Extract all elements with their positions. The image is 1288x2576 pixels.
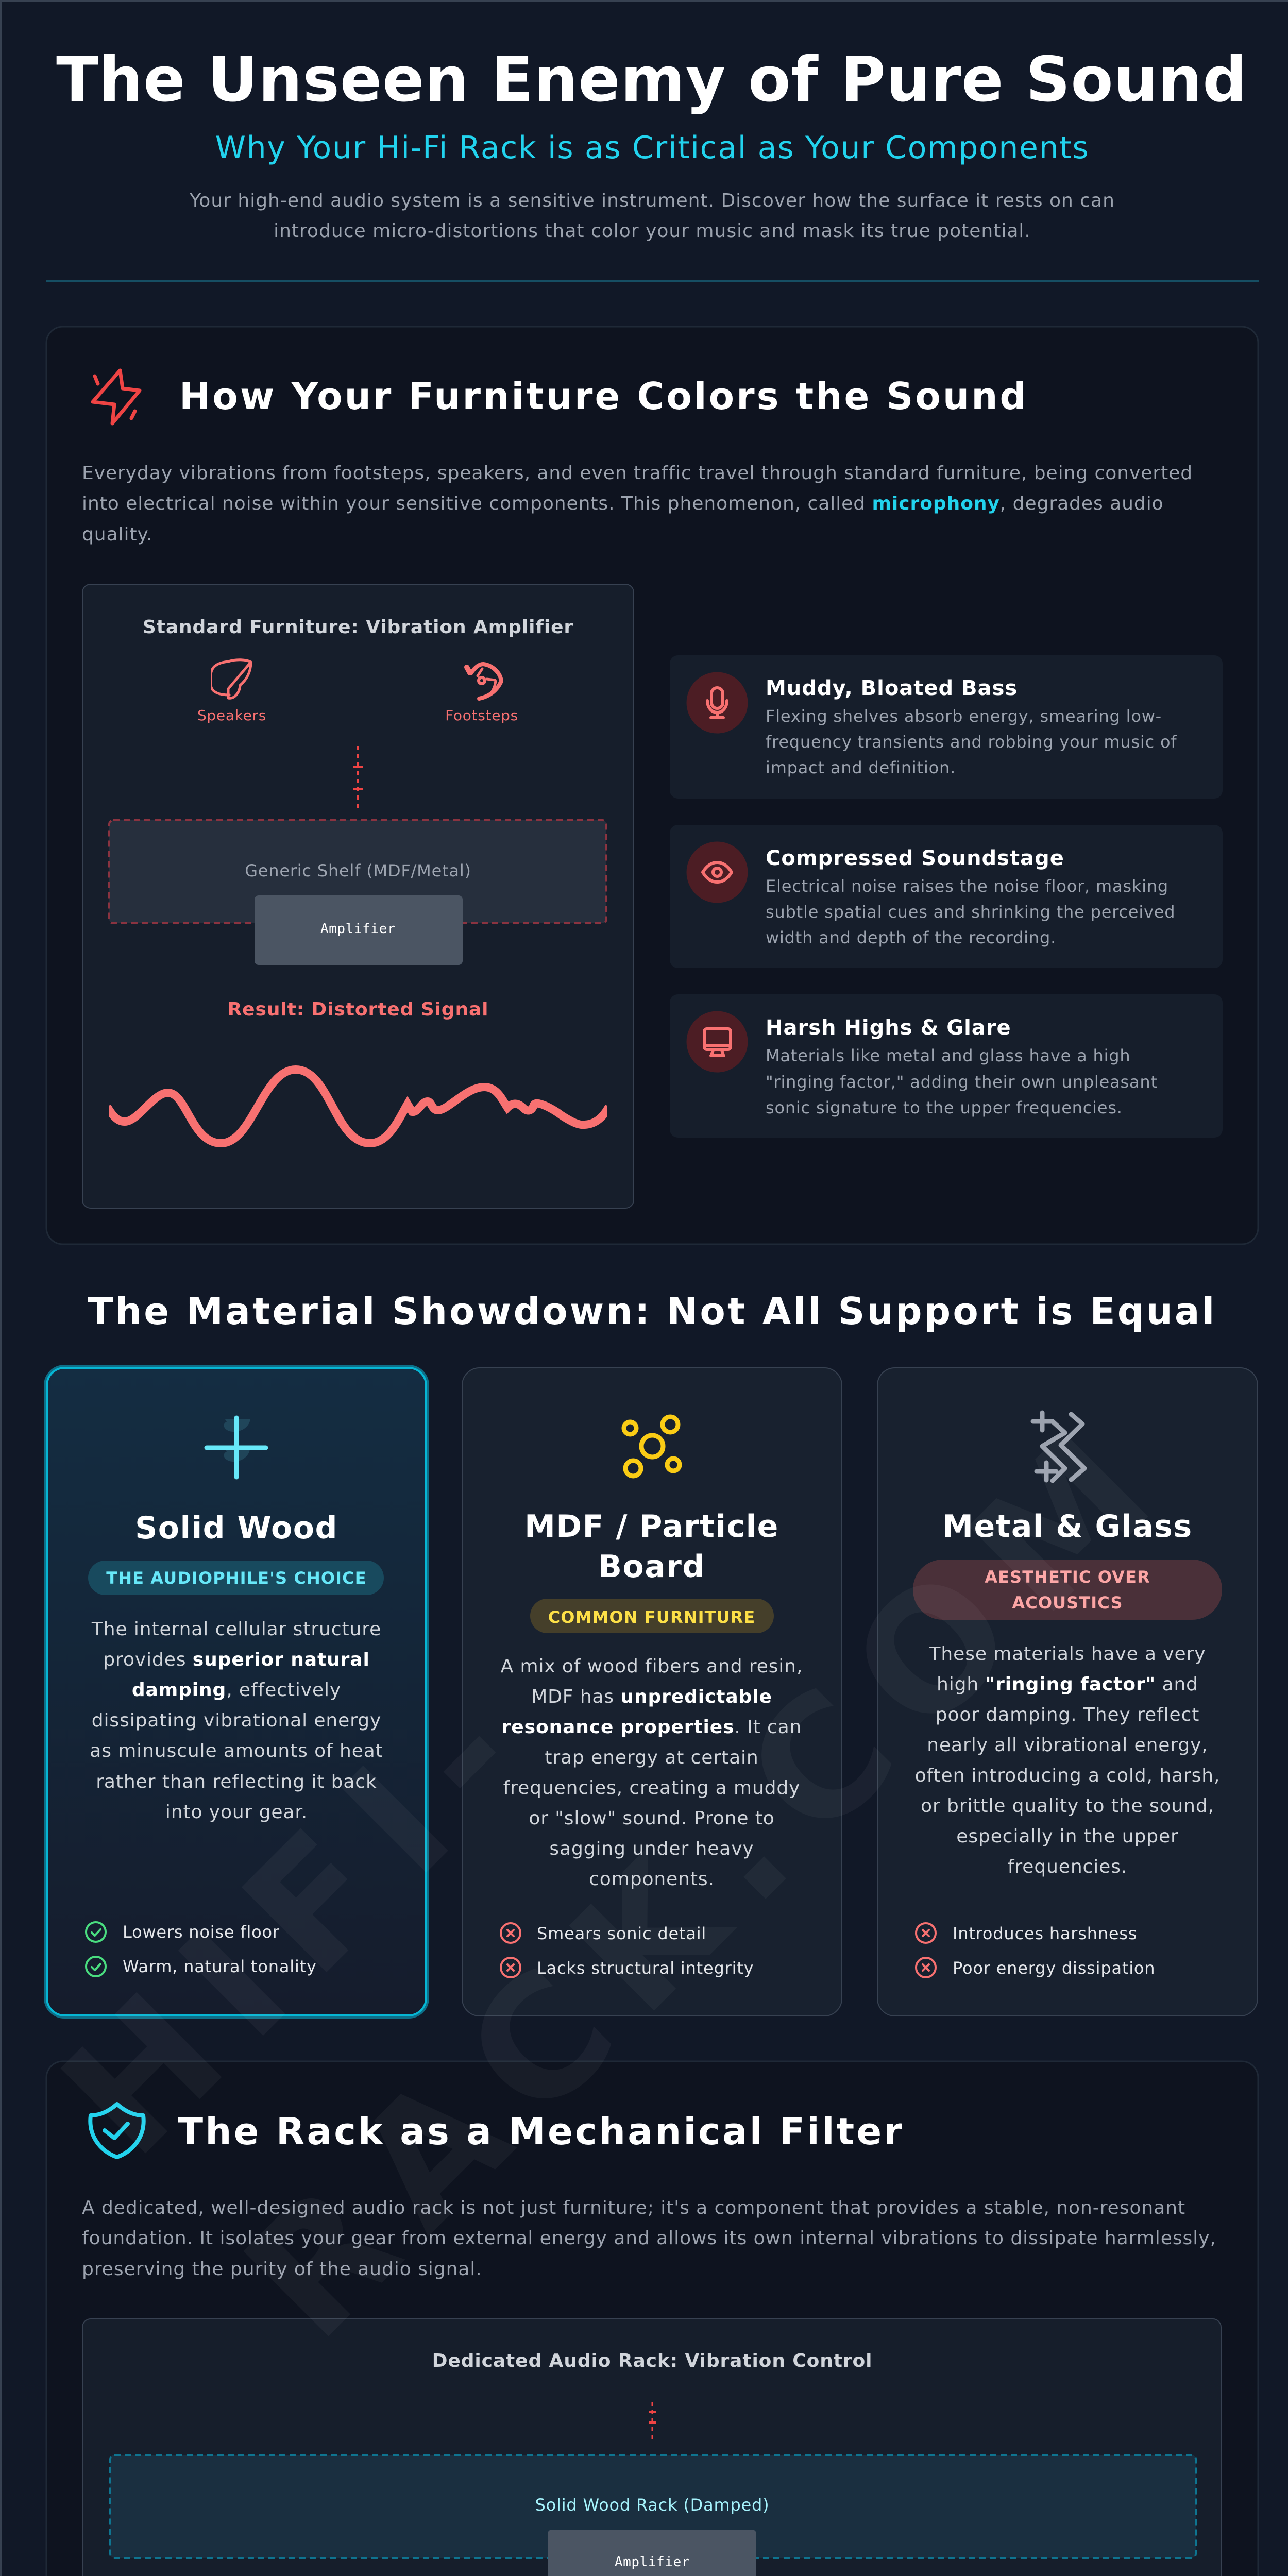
card title: Solid Wood: [135, 1510, 338, 1546]
feature card: muddy bass: [670, 655, 1223, 799]
intro text: [189, 190, 1115, 242]
diagram title: Dedicated Audio Rack: Vibration Control: [432, 2350, 872, 2371]
feature text: sonic signature to the upper frequencies.: [766, 1098, 1123, 1117]
card text: components.: [589, 1869, 715, 1890]
list item: Warm, natural tonality: [123, 1957, 317, 1976]
benefit list: [86, 1922, 317, 1976]
panel: mdf particle board: [462, 1368, 842, 2016]
card text: high "ringing factor" and: [937, 1674, 1198, 1695]
amplifier: Amplifier: [615, 2554, 690, 2570]
section text: into electrical noise within your sensitive components. This phenomenon, called microphony, degrades audio: [82, 493, 1164, 514]
card text: sagging under heavy: [549, 1838, 754, 1859]
badge: COMMON FURNITURE: [548, 1607, 755, 1627]
arrow: vibration path: [353, 746, 363, 810]
card text: provides superior natural: [103, 1649, 370, 1670]
feature text: subtle spatial cues and shrinking the perceived: [766, 902, 1175, 922]
feature text: impact and definition.: [766, 758, 956, 777]
icon: eye: [686, 842, 748, 903]
card title: Board: [598, 1549, 705, 1585]
shelf: [109, 820, 606, 923]
card title: [524, 1509, 779, 1585]
feature text: Flexing shelves absorb energy, smearing low-: [766, 706, 1162, 726]
feature text: width and depth of the recording.: [766, 928, 1056, 947]
feature text: frequency transients and robbing your music of: [766, 732, 1177, 752]
diagram title: Standard Furniture: Vibration Amplifier: [143, 617, 573, 638]
arrow: damped vibration: [649, 2402, 656, 2441]
card text: [915, 1643, 1220, 1877]
card title: Metal & Glass: [942, 1509, 1193, 1545]
card text: The internal cellular structure: [91, 1619, 381, 1640]
section heading: The Rack as a Mechanical Filter: [178, 2110, 904, 2153]
icon: shield check: [90, 2104, 144, 2157]
rack label: Solid Wood Rack (Damped): [535, 2495, 769, 2515]
amplifier: Amplifier: [320, 921, 396, 937]
card text: especially in the upper: [956, 1826, 1179, 1847]
drawback list: [501, 1923, 754, 1978]
section text: A dedicated, well-designed audio rack is not just furniture; it's a component that provides a stable, non-resonant: [82, 2197, 1185, 2218]
card text: as minuscule amounts of heat: [90, 1740, 383, 1761]
feature text: "ringing factor," adding their own unpleasant: [766, 1072, 1158, 1092]
subtitle: Why Your Hi-Fi Rack is as Critical as Your Components: [215, 130, 1089, 166]
panel: rack as mechanical filter: [46, 2061, 1258, 2576]
intro text: Your high-end audio system is a sensitive instrument. Discover how the surface it rests on can: [189, 190, 1115, 211]
feature text: [766, 876, 1175, 947]
icon: monitor: [686, 1011, 748, 1073]
drawback list: [916, 1923, 1155, 1978]
watermark: HIFI-: [27, 1643, 575, 2192]
feature text: [766, 706, 1177, 777]
card text: dissipating vibrational energy: [92, 1710, 381, 1731]
diagram: dedicated rack: [82, 2319, 1221, 2576]
rack shelf: [110, 2455, 1196, 2558]
badge: [88, 1561, 384, 1595]
section text: Everyday vibrations from footsteps, speakers, and even traffic travel through standard furniture, being converted: [82, 463, 1193, 484]
section text: [82, 463, 1193, 545]
icon: speakers: [211, 660, 251, 698]
section text: preserving the purity of the audio signal.: [82, 2259, 482, 2280]
icon: cross: [501, 1958, 520, 1977]
icon: wood plus: [207, 1418, 266, 1477]
card text: poor damping. They reflect: [936, 1704, 1199, 1725]
card text: trap energy at certain: [545, 1747, 759, 1768]
icon: cross: [916, 1958, 936, 1977]
card text: nearly all vibrational energy,: [927, 1735, 1208, 1756]
icon: lightning bolt: [93, 370, 140, 423]
card text: or "slow" sound. Prone to: [529, 1808, 775, 1829]
badge: AESTHETIC OVER: [985, 1567, 1150, 1587]
label: footsteps: Footsteps: [445, 707, 518, 724]
icon: metal zigzag: [1033, 1413, 1084, 1481]
panel: solid wood: [45, 1366, 428, 2018]
feature text: Materials like metal and glass have a high: [766, 1046, 1130, 1065]
card text: damping, effectively: [132, 1680, 341, 1701]
badge: THE AUDIOPHILE'S CHOICE: [106, 1568, 367, 1588]
section text: quality.: [82, 524, 152, 545]
badge: [530, 1599, 774, 1633]
label: speakers: Speakers: [197, 707, 266, 724]
intro text: introduce micro-distortions that color your music and mask its true potential.: [274, 221, 1031, 242]
card text: A mix of wood fibers and resin,: [501, 1656, 803, 1677]
list item: Lacks structural integrity: [537, 1958, 754, 1978]
shelf label: Generic Shelf (MDF/Metal): [245, 861, 471, 880]
feature title: Compressed Soundstage: [766, 846, 1064, 870]
panel: how your furniture colors the sound: [46, 327, 1258, 1244]
card text: rather than reflecting it back: [96, 1771, 377, 1792]
icon: check: [86, 1957, 106, 1976]
watermark: RACK.COM: [210, 1378, 1207, 2375]
diagram: standard furniture: [82, 584, 634, 1208]
section text: [82, 2197, 1216, 2280]
heading: material showdown: The Material Showdown: Not All Support is Equal: [88, 1290, 1216, 1333]
list item: Smears sonic detail: [537, 1924, 706, 1943]
result label: Result: Distorted Signal: [228, 999, 488, 1020]
icon: cross: [501, 1923, 520, 1943]
card text: [501, 1656, 803, 1890]
list item: Lowers noise floor: [123, 1922, 280, 1942]
list item: Poor energy dissipation: [953, 1958, 1155, 1978]
icon: cross: [916, 1923, 936, 1943]
card title: MDF / Particle: [524, 1509, 779, 1545]
card text: into your gear.: [165, 1802, 308, 1823]
icon: particles: [624, 1417, 680, 1476]
icon: footsteps: [467, 664, 501, 699]
chart: distorted waveform: [107, 1070, 609, 1143]
feature text: Electrical noise raises the noise floor, masking: [766, 876, 1168, 896]
card text: or brittle quality to the sound,: [921, 1795, 1214, 1817]
card text: frequencies, creating a muddy: [503, 1777, 800, 1799]
card text: resonance properties. It can: [502, 1717, 802, 1738]
feature title: Muddy, Bloated Bass: [766, 676, 1018, 700]
feature text: [766, 1046, 1158, 1117]
card text: MDF has unpredictable: [531, 1686, 772, 1707]
card text: frequencies.: [1008, 1856, 1127, 1877]
feature card: compressed soundstage: [670, 825, 1223, 968]
section text: foundation. It isolates your gear from external energy and allows its own internal vibrations to dissipate harmlessly,: [82, 2228, 1216, 2249]
icon: microphone: [686, 672, 748, 734]
feature title: Harsh Highs & Glare: [766, 1016, 1011, 1040]
amplifier: [548, 2530, 756, 2576]
card text: [90, 1619, 383, 1823]
section heading: How Your Furniture Colors the Sound: [179, 375, 1028, 418]
feature card: harsh highs: [670, 994, 1223, 1138]
title: The Unseen Enemy of Pure Sound: [56, 44, 1247, 116]
badge: [913, 1560, 1222, 1620]
header: [56, 44, 1247, 242]
badge: ACOUSTICS: [1012, 1593, 1123, 1613]
icon: check: [86, 1922, 106, 1942]
panel: metal and glass: [877, 1368, 1258, 2016]
card text: often introducing a cold, harsh,: [915, 1765, 1220, 1786]
card text: These materials have a very: [929, 1643, 1206, 1665]
amplifier: [255, 895, 463, 965]
list item: Introduces harshness: [953, 1924, 1137, 1943]
